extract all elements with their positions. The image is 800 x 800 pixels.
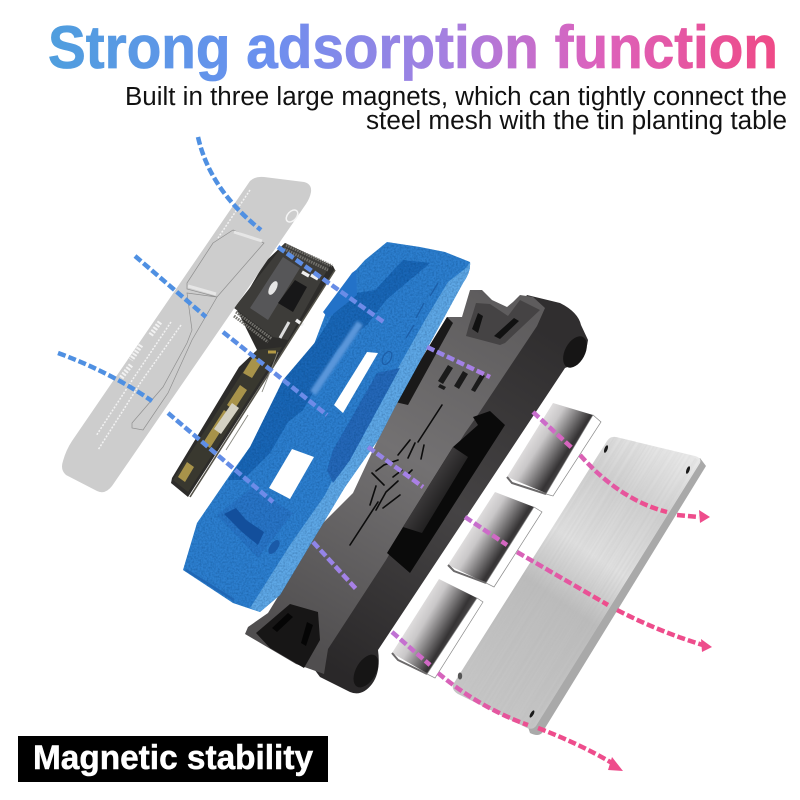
foam side lugs — [323, 270, 357, 318]
side recess — [387, 411, 505, 573]
foam right channel — [327, 368, 400, 483]
steel base plate — [452, 436, 706, 735]
foam embossed text — [380, 283, 438, 366]
black magnetic base — [245, 290, 592, 693]
badge: magnetic stability: Magnetic stability — [33, 739, 313, 777]
magnetic field lines — [58, 137, 667, 725]
subtitle text block — [125, 83, 787, 135]
foam windows — [334, 352, 378, 413]
foam bottom lip — [186, 570, 234, 600]
subtitle text block: Built in three large magnets, which can tightly connect the — [125, 83, 787, 111]
arrow top — [677, 510, 710, 523]
arrow middle — [617, 610, 712, 652]
top face — [245, 290, 545, 674]
magnet 2 — [448, 492, 542, 587]
arrow bottom — [538, 728, 623, 771]
magnets — [392, 403, 601, 678]
circuit board — [171, 243, 335, 497]
dark clip top — [466, 300, 540, 345]
magnet 1 — [507, 403, 601, 496]
blue foam nest — [183, 242, 470, 612]
field line bottom — [58, 353, 528, 725]
foam bottom cavity — [217, 487, 293, 558]
left black bar — [395, 317, 453, 405]
field line middle — [135, 256, 608, 605]
magnet 3 — [392, 579, 483, 678]
steel stencil mesh — [62, 177, 311, 492]
subtitle text block: steel mesh with the tin planting table — [366, 107, 787, 135]
right side face — [300, 295, 588, 693]
foam upper cavity — [228, 260, 430, 480]
title: Strong adsorption function — [48, 14, 778, 81]
engraved brand marks — [438, 365, 485, 392]
dark clip bottom — [256, 604, 320, 668]
foam light edge — [250, 262, 470, 612]
field line top — [198, 137, 667, 512]
engraved logo mark — [350, 405, 442, 545]
